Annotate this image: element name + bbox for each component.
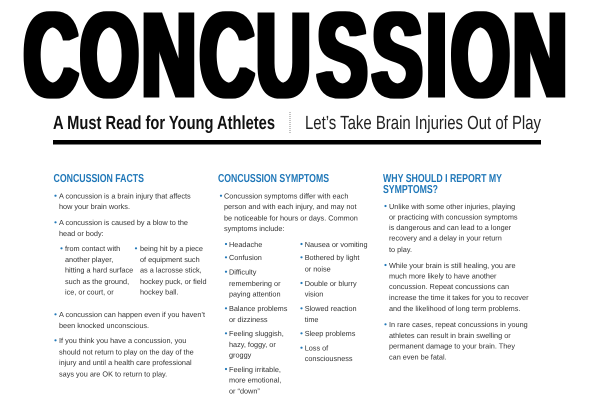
fact: unconscious: A concussion can happen even if you haven’t bbox=[59, 310, 205, 319]
fact: brain injury: A concussion is a brain injury that affects bbox=[59, 192, 191, 200]
heading: concussion symptoms: CONCUSSION SYMPTOMS bbox=[218, 173, 329, 185]
reason: rare cases: permanent damage to your brain. They bbox=[389, 342, 515, 350]
reason: longer recovery: is dangerous and can lead to a longer bbox=[389, 223, 512, 232]
symptom list: right bbox=[300, 240, 368, 363]
sub-bullet: contact: another player, bbox=[65, 255, 113, 264]
heading: why should I report my symptoms: SYMPTOMS? bbox=[383, 184, 438, 196]
symptom list: left: Balance problems bbox=[229, 304, 288, 313]
fact: brain injury bbox=[54, 192, 191, 211]
fact: return to play: should not return to play on the day of the bbox=[59, 348, 194, 356]
reason: longer recovery: recovery and a delay in your return bbox=[389, 234, 502, 242]
fact: unconscious: been knocked unconscious. bbox=[59, 321, 149, 330]
symptom list: right: Double or blurry bbox=[305, 279, 357, 288]
reason: rare cases: athletes can result in brain swelling or bbox=[389, 331, 511, 340]
reason: longer recovery: Unlike with some other injuries, playing bbox=[389, 202, 515, 211]
symptom list: left: Feeling irritable, bbox=[229, 365, 281, 374]
symptom list: left: Confusion bbox=[229, 253, 262, 262]
reason: another concussion bbox=[384, 261, 529, 313]
symptoms intro: be noticeable for hours or days. Common bbox=[224, 214, 358, 222]
reason: another concussion: and the likelihood of long term problems. bbox=[389, 304, 520, 313]
sub-bullet: contact: hitting a hard surface bbox=[65, 266, 133, 274]
reason: longer recovery: to play. bbox=[389, 245, 412, 254]
subtitle: must read: A Must Read for Young Athletes bbox=[53, 113, 275, 134]
symptom list: left bbox=[225, 240, 288, 396]
sub-bullet: contact: from contact with bbox=[65, 244, 120, 253]
fact: brain injury: how your brain works. bbox=[59, 202, 130, 211]
reason: another concussion: increase the time it takes for you to recover bbox=[389, 293, 529, 302]
symptom list: right: Sleep problems bbox=[305, 329, 356, 338]
symptom list: right: Slowed reaction bbox=[305, 304, 357, 313]
reason: rare cases bbox=[384, 320, 528, 362]
fact: caused by a blow: A concussion is caused by a blow to the bbox=[59, 218, 188, 227]
symptom list: left: more emotional, bbox=[229, 376, 281, 384]
sub-bullet: equipment: of equipment such bbox=[140, 255, 200, 264]
fact: caused by a blow bbox=[54, 218, 188, 238]
symptom list: right: Loss of bbox=[305, 344, 329, 352]
symptoms intro bbox=[220, 192, 358, 233]
symptom list: left: groggy bbox=[229, 350, 252, 360]
symptoms intro: Concussion symptoms differ with each bbox=[224, 192, 348, 200]
symptom list: left: Difficulty bbox=[229, 268, 257, 276]
symptom list: right: vision bbox=[305, 290, 323, 298]
fact: return to play: If you think you have a concussion, you bbox=[59, 336, 186, 345]
heading: why should I report my symptoms bbox=[383, 173, 502, 196]
panel: concussion facts bbox=[54, 173, 207, 378]
symptom list: left: paying attention bbox=[229, 290, 281, 298]
sub-bullet: equipment: being hit by a piece bbox=[140, 244, 203, 253]
symptom list: left: or dizziness bbox=[229, 315, 268, 324]
reason: rare cases: can even be fatal. bbox=[389, 352, 447, 362]
sub-bullet: equipment: hockey puck, or field bbox=[140, 277, 207, 286]
sub-bullet: contact: such as the ground, bbox=[65, 277, 129, 286]
symptom list: right: consciousness bbox=[305, 354, 353, 363]
heading: why should I report my symptoms: WHY SHOULD I REPORT MY bbox=[383, 173, 502, 185]
symptoms intro: person and with each injury, and may not bbox=[224, 202, 357, 211]
panel: why report bbox=[383, 173, 529, 362]
reason: longer recovery bbox=[384, 202, 518, 254]
symptom list: left: or “down” bbox=[229, 386, 260, 396]
symptom list: right: Bothered by light bbox=[305, 253, 359, 262]
sub-bullet: equipment: as a lacrosse stick, bbox=[140, 266, 202, 274]
reason: rare cases: In rare cases, repeat concussions in young bbox=[389, 320, 528, 329]
reason: another concussion: concussion. Repeat concussions can bbox=[389, 282, 509, 291]
fact: unconscious bbox=[54, 310, 205, 330]
heading: concussion facts: CONCUSSION FACTS bbox=[54, 173, 144, 185]
reason: another concussion: much more likely to have another bbox=[389, 272, 497, 280]
reason: another concussion: While your brain is still healing, you are bbox=[389, 261, 516, 270]
panel: concussion symptoms bbox=[218, 173, 368, 396]
fact: caused by a blow: head or body: bbox=[59, 229, 104, 238]
symptom list: right: or noise bbox=[305, 264, 331, 274]
symptom list: left: Headache bbox=[229, 240, 262, 249]
symptoms intro: symptoms include: bbox=[224, 224, 284, 233]
fact: return to play: says you are OK to return to play. bbox=[59, 370, 167, 378]
symptom list: right: time bbox=[305, 315, 318, 324]
symptom list: left: Feeling sluggish, bbox=[229, 329, 284, 338]
sub-bullet: equipment: hockey ball. bbox=[140, 288, 179, 296]
symptom list: right: Nausea or vomiting bbox=[305, 240, 368, 249]
sub-bullet: equipment bbox=[135, 244, 207, 296]
sub-bullet: contact: ice, or court, or bbox=[65, 288, 114, 296]
fact: return to play bbox=[54, 336, 194, 378]
reason: longer recovery: or practicing with concussion symptoms bbox=[389, 212, 518, 222]
fact: return to play: injury and until a health care professional bbox=[59, 358, 192, 367]
symptom list: left: hazy, foggy, or bbox=[229, 340, 276, 349]
subtitle: brain injuries: Let’s Take Brain Injuries Out of Play bbox=[305, 113, 541, 134]
symptom list: left: remembering or bbox=[229, 279, 281, 288]
sub-bullet: contact bbox=[60, 244, 133, 296]
